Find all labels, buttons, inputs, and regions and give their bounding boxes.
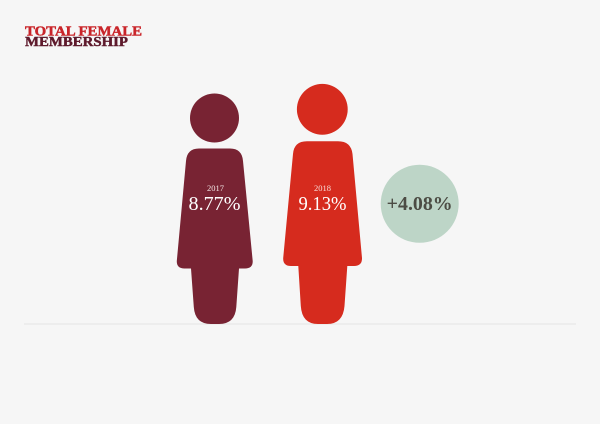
label: 2017: 2017 (207, 183, 224, 193)
title (25, 23, 142, 49)
figure: 2018 (283, 84, 362, 324)
figure: 2017 (177, 94, 253, 324)
value: 9.13%: 9.13% (298, 194, 346, 215)
value: 8.77%: 8.77% (188, 194, 240, 215)
label: 2018: 2018 (314, 183, 331, 193)
icon: 2017 body (177, 148, 253, 324)
callout: change (381, 165, 459, 243)
title: MEMBERSHIP (25, 34, 128, 49)
icon: 2018 head (297, 84, 348, 135)
icon: 2017 head (190, 94, 239, 142)
icon: 2018 body (283, 141, 362, 324)
callout: change: +4.08% (387, 194, 453, 215)
title: TOTAL FEMALE (25, 23, 142, 38)
